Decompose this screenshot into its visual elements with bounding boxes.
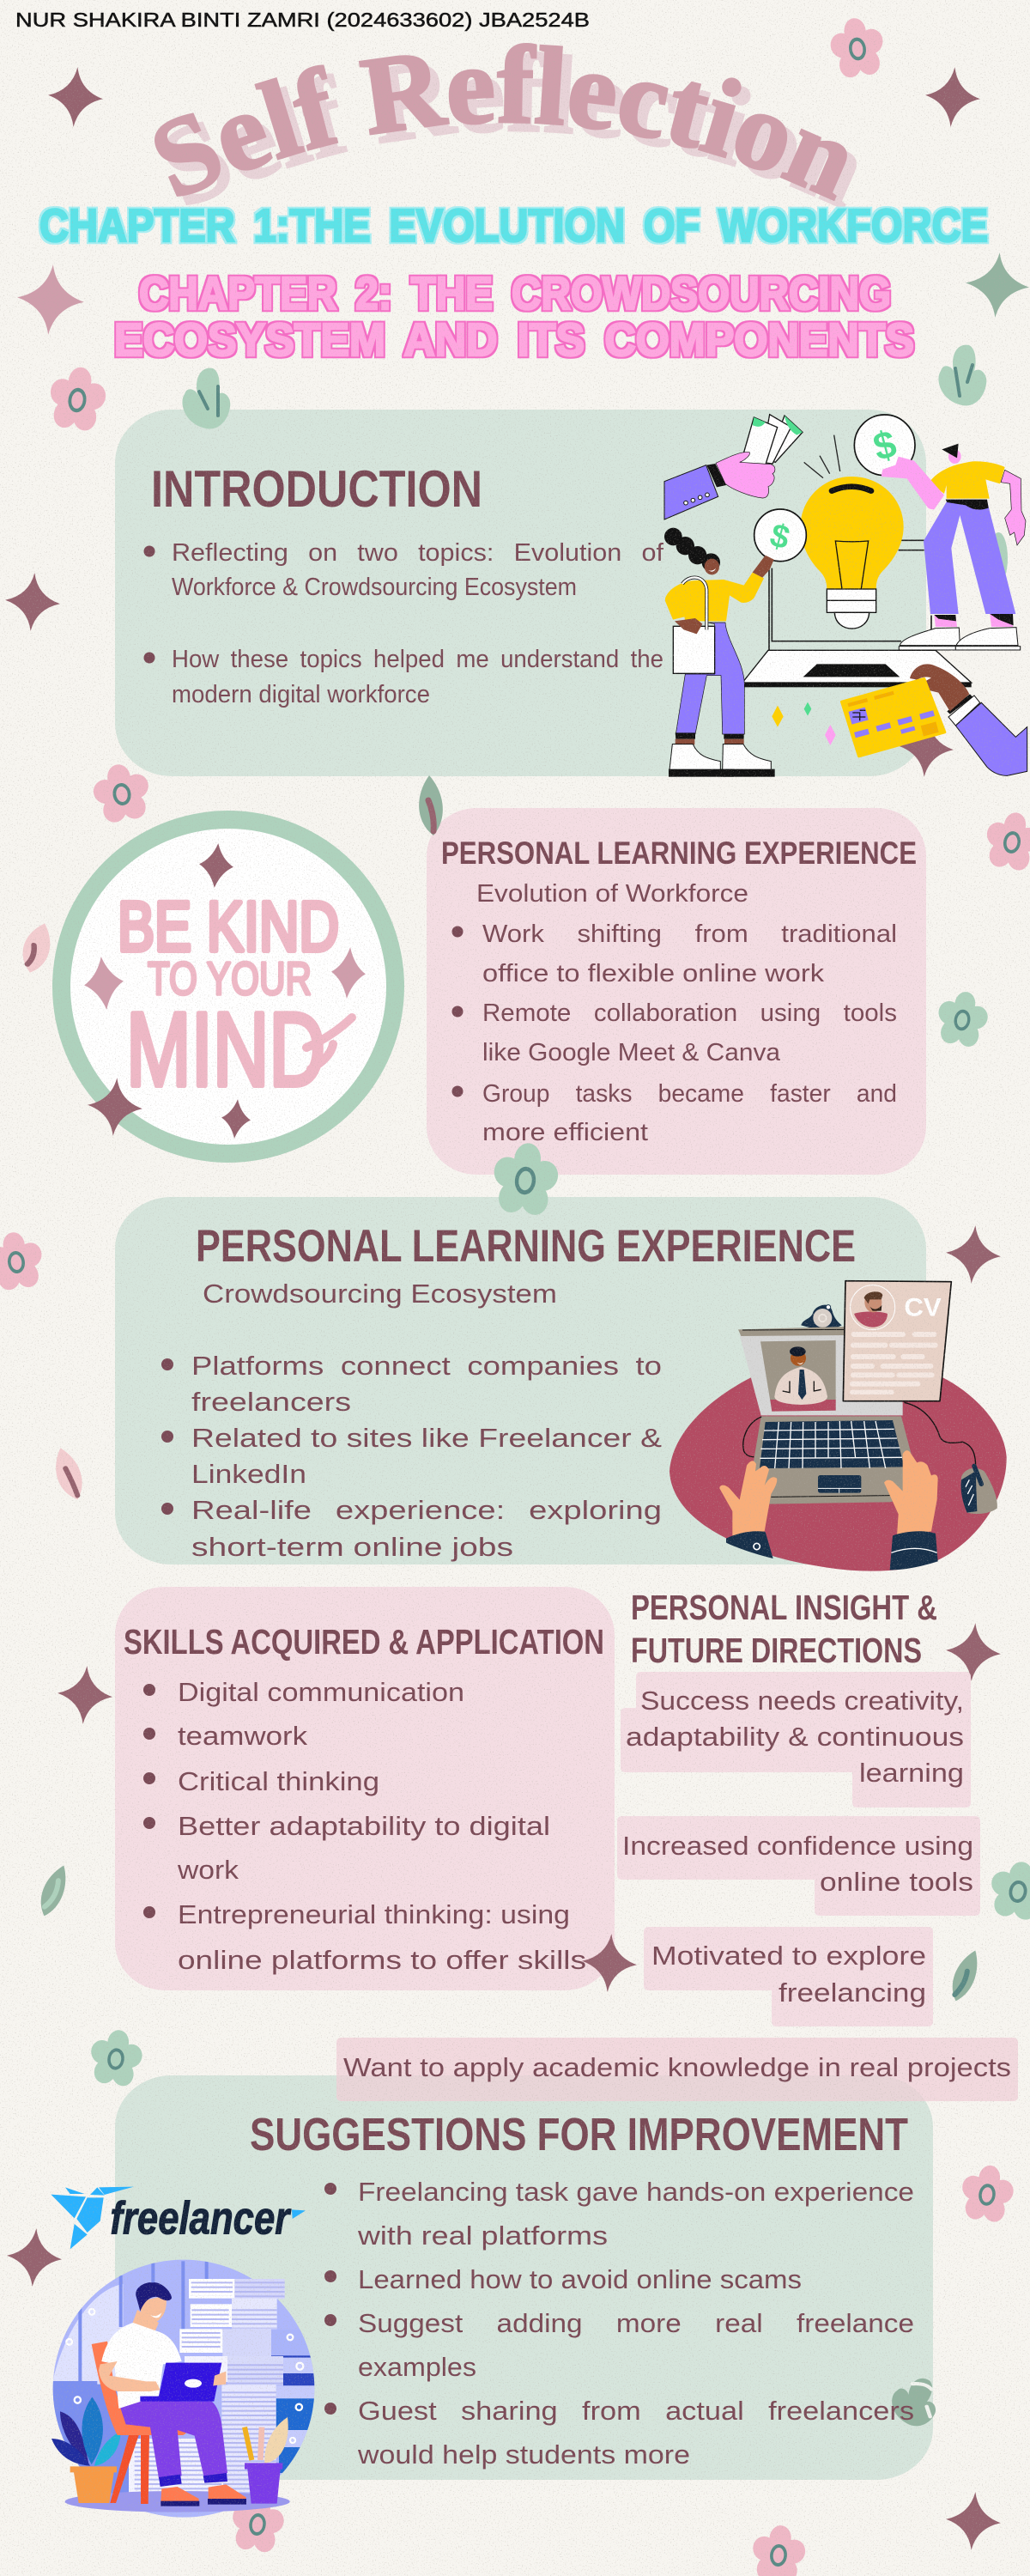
badge text: MIND: [126, 991, 325, 1108]
chapter 2 heading: CHAPTER 2: THE CROWDSOURCING: [139, 268, 891, 319]
person: [99, 2282, 246, 2506]
hand with card: [842, 664, 1027, 775]
star behind card: [897, 717, 955, 779]
insight: confidence: online tools: [820, 1867, 973, 1897]
bullet: Work shifting from traditional: [482, 920, 897, 948]
platform: [65, 2491, 290, 2512]
decorative plant: [182, 368, 230, 428]
flower over panels: [486, 1139, 565, 1224]
insight: success: [621, 1672, 971, 1807]
arm: [99, 2361, 161, 2391]
insight: confidence: [617, 1816, 980, 1916]
skill: adaptability: Better adaptability to digital: [178, 1811, 550, 1841]
skill: entrepreneurial: online platforms to offer skills: [178, 1945, 586, 1975]
coin top: $: [869, 422, 900, 469]
sparkles: [772, 702, 836, 745]
bullet: examples: [358, 2352, 476, 2382]
trackpad: [818, 1475, 861, 1493]
bullet: Real-life experience: exploring: [191, 1495, 662, 1525]
panel heading: PERSONAL LEARNING EXPERIENCE: [441, 835, 917, 871]
panel: learning experience crowdsourcing: [115, 1197, 926, 1564]
bullet: LinkedIn: [191, 1459, 306, 1489]
skill: entrepreneurial: Entrepreneurial thinking: using: [178, 1899, 570, 1929]
illustration and logo: freelancer: [51, 2187, 318, 2518]
paper stacks: [129, 2279, 285, 2493]
bullet: [161, 1351, 662, 1417]
bullet: would help students more: [357, 2439, 690, 2470]
insight: motivated: [644, 1927, 933, 2026]
insight: apply knowledge: Want to apply academic knowledge in real projects: [343, 2052, 1011, 2082]
shoes: [161, 2487, 199, 2501]
title: Self Reflection: Self Reflection: [154, 43, 857, 206]
bullet: [324, 2396, 914, 2470]
backdrop circle: [52, 2258, 318, 2518]
decorative leaves: [15, 345, 986, 2004]
filing shelves: [66, 2309, 318, 2473]
badge sparkles: [82, 841, 367, 1139]
person on screen: [774, 1346, 827, 1405]
introduction bullet 1: Workforce & Crowdsourcing Ecosystem: [172, 574, 577, 601]
bullet: freelancers: [191, 1387, 351, 1417]
webcam: [801, 1305, 842, 1333]
plant pot: [52, 2397, 121, 2503]
coin left: [754, 509, 806, 562]
skill: digital communication: Digital communication: [178, 1677, 464, 1707]
panel subheading: Evolution of Workforce: [476, 880, 748, 908]
skill: teamwork: teamwork: [178, 1721, 308, 1751]
coin left: $: [766, 517, 793, 557]
bullet: [451, 999, 897, 1066]
bullet: short-term online jobs: [191, 1532, 513, 1562]
bullet: Related to sites like Freelancer &: [191, 1423, 662, 1453]
cuffs: [726, 1531, 938, 1570]
bullet: Suggest adding more real freelance: [358, 2308, 914, 2338]
bullet: Learned how to avoid online scams: [358, 2264, 802, 2294]
bullet: [451, 920, 897, 987]
trousers: [120, 2400, 227, 2479]
CV card: [843, 1281, 951, 1401]
panel subheading: Crowdsourcing Ecosystem: [203, 1279, 557, 1309]
laptop screen: [738, 1327, 903, 1415]
insight: success: learning: [859, 1758, 964, 1788]
badge text: BE KIND: [118, 888, 339, 966]
introduction bullet 2: How these topics helped me understand the: [172, 646, 663, 673]
lightbulb: [801, 435, 904, 629]
mouse: [743, 1402, 997, 1514]
bullet: Platforms connect companies to: [191, 1351, 662, 1381]
neck and head: [132, 2310, 159, 2333]
badge text: [118, 888, 339, 1108]
bullet: [324, 2177, 914, 2251]
bullet: [161, 1495, 662, 1562]
insight: motivated: Motivated to explore: [651, 1941, 926, 1971]
bullet: [451, 1080, 897, 1146]
coin top: [854, 415, 915, 476]
insight: motivated: freelancing: [779, 1978, 926, 2008]
decorative plant: [886, 2370, 945, 2432]
bullet: Group tasks became faster and: [482, 1080, 897, 1108]
author name: NUR SHAKIRA BINTI ZAMRI (2024633602) JBA2524B: [15, 9, 590, 31]
panel heading: SKILLS ACQUIRED & APPLICATION: [124, 1622, 604, 1662]
skill: adaptability: [143, 1811, 550, 1885]
insight: apply knowledge: [336, 2038, 1018, 2101]
decorative leaf: [419, 775, 443, 835]
introduction bullet 1: [144, 539, 664, 601]
skill: entrepreneurial: [143, 1899, 586, 1975]
keyboard: [760, 1420, 904, 1468]
man's arm: [882, 457, 944, 509]
insights heading: FUTURE DIRECTIONS: [631, 1631, 922, 1670]
insights heading: PERSONAL INSIGHT &: [631, 1588, 937, 1627]
skill: critical thinking: Critical thinking: [178, 1766, 379, 1796]
pencil pot: [245, 2417, 288, 2504]
illustration: laptop and CV: [670, 1281, 1007, 1571]
introduction bullet 2: [144, 646, 663, 708]
illustration: money lightbulb scene: [664, 415, 1027, 777]
introduction bullet 2: modern digital workforce: [172, 681, 430, 708]
skill: adaptability: work: [177, 1855, 239, 1885]
insight: success: adaptability & continuous: [626, 1722, 964, 1752]
chair: [92, 2342, 188, 2504]
woman with coin: [664, 528, 775, 777]
bullet: [324, 2308, 914, 2382]
panel: suggestions for improvement: [115, 2075, 945, 2480]
panel: skills acquired: [115, 1587, 615, 1990]
hand with cash: [664, 415, 803, 519]
laptop: [140, 2363, 221, 2402]
man with coin: [899, 444, 1026, 650]
badge: be kind to your mind: [52, 811, 404, 1163]
chapter 2 heading: [114, 268, 914, 366]
bullet: office to flexible online work: [482, 960, 825, 987]
chapter 2 heading: ECOSYSTEM AND ITS COMPONENTS: [114, 314, 914, 366]
insights heading: [631, 1588, 937, 1670]
hands: [719, 1450, 938, 1535]
logo wordmark: freelancer: [110, 2194, 292, 2245]
badge text: TO YOUR: [148, 953, 312, 1005]
bullet: Guest sharing from actual freelancers: [358, 2396, 914, 2426]
bullet: more efficient: [482, 1119, 648, 1146]
bullet: Freelancing task gave hands-on experience: [358, 2177, 914, 2207]
CV label: CV: [904, 1294, 942, 1322]
shirt: [101, 2323, 182, 2409]
laptop base: [753, 1416, 912, 1504]
introduction bullet 1: Reflecting on two topics: Evolution of: [172, 539, 664, 567]
monitor and stand: [742, 540, 972, 687]
bullet: like Google Meet & Canva: [482, 1039, 781, 1066]
insight: confidence: Increased confidence using: [622, 1831, 973, 1861]
star on skills panel corner: [580, 1932, 639, 1994]
bullet: [161, 1423, 662, 1489]
panel heading: PERSONAL LEARNING EXPERIENCE: [196, 1221, 856, 1272]
panel: introduction: [115, 368, 926, 776]
bullet: with real platforms: [357, 2221, 608, 2251]
logo bird: [51, 2187, 134, 2249]
insight: success: Success needs creativity,: [640, 1686, 964, 1716]
panel: learning experience evolution: [419, 775, 926, 1175]
introduction heading: INTRODUCTION: [151, 460, 482, 518]
red blob: [670, 1376, 1007, 1571]
bullet: Remote collaboration using tools: [482, 999, 897, 1027]
